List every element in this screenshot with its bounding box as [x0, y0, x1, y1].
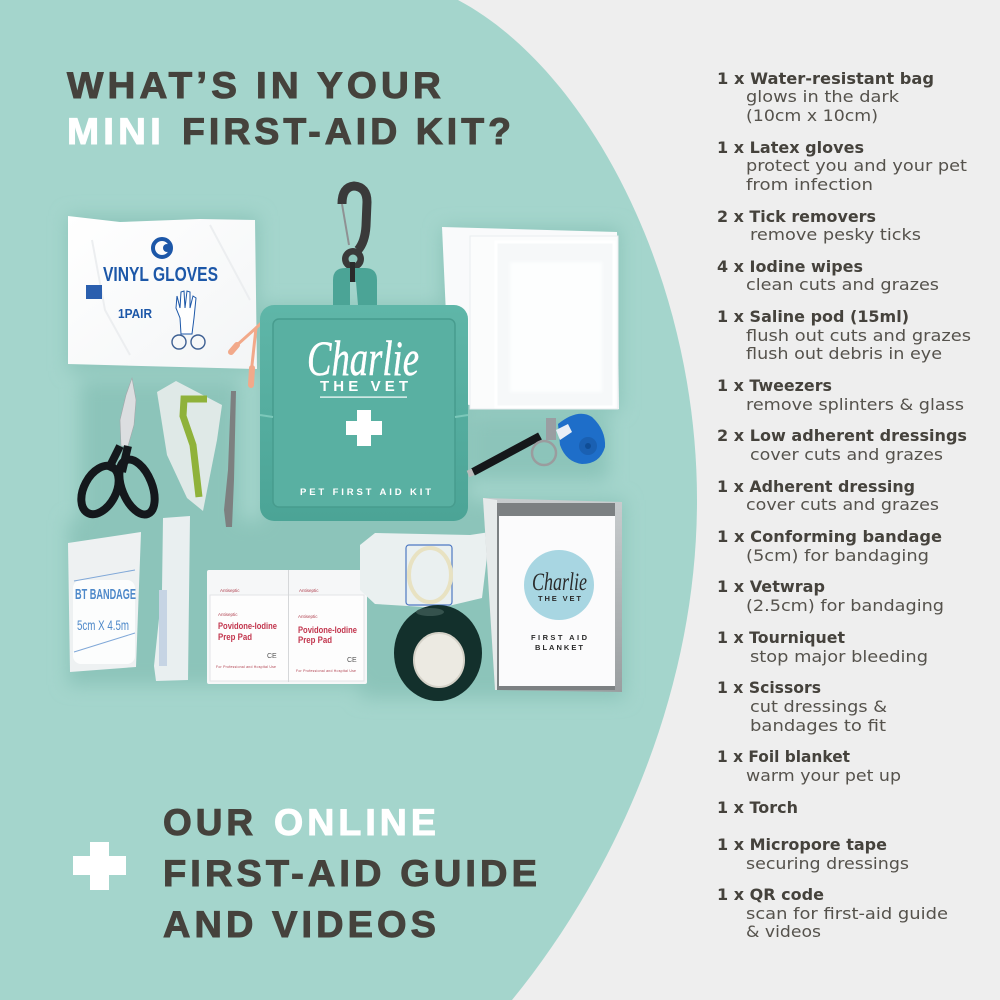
item: vinyl gloves packet: VINYL GLOVES — [103, 264, 218, 286]
bag caption: PET FIRST AID KIT — [300, 487, 431, 498]
heading: online guide: AND VIDEOS — [163, 904, 440, 945]
list item: adherent dressing: 1 x Adherent dressing — [717, 477, 915, 496]
list item: low adherent dressings: cover cuts and grazes — [750, 445, 943, 464]
list item: QR code — [717, 885, 948, 941]
bag loop tab — [333, 268, 377, 305]
item: dressings stack — [442, 227, 619, 409]
list item: bag: 1 x Water-resistant bag — [717, 69, 934, 88]
item: foil blanket: FIRST AID — [531, 633, 588, 642]
list item: bag — [717, 69, 934, 125]
list item: gloves: protect you and your pet — [746, 156, 967, 175]
list item: tweezers — [717, 376, 964, 414]
item: iodine wipes: Antiseptic — [220, 588, 240, 593]
item: scissors — [74, 378, 162, 520]
list item: micropore tape: securing dressings — [746, 854, 909, 873]
list item: saline pod: flush out cuts and grazes — [746, 326, 971, 345]
list item: adherent dressing — [717, 477, 939, 514]
blanket logo — [524, 550, 594, 620]
list item: saline pod: flush out debris in eye — [746, 344, 942, 363]
list item: vetwrap: 1 x Vetwrap — [717, 577, 825, 596]
bag logo: Charlie — [307, 330, 419, 386]
list item: tick removers: remove pesky ticks — [750, 225, 921, 244]
item: foil blanket: BLANKET — [535, 643, 583, 652]
item: vetwrap roll — [394, 605, 482, 701]
list item: scissors: bandages to fit — [750, 716, 886, 735]
list item: tweezers: remove splinters & glass — [746, 395, 964, 414]
list item: gloves: 1 x Latex gloves — [717, 138, 864, 157]
list item: micropore tape — [717, 835, 909, 873]
title: WHAT’S IN YOUR — [67, 65, 445, 106]
item: iodine wipes: Prep Pad — [298, 635, 332, 645]
list item: foil blanket: warm your pet up — [746, 766, 901, 785]
bag body — [260, 305, 468, 521]
item: iodine wipes: Antiseptic — [299, 588, 319, 593]
list item: iodine wipes: 4 x Iodine wipes — [717, 257, 863, 276]
list item: low adherent dressings — [717, 426, 967, 464]
contents list — [717, 69, 971, 941]
item: saline pod — [154, 516, 190, 681]
item: iodine wipes: CE — [347, 657, 357, 664]
item: first-aid bag — [231, 262, 468, 521]
list item: iodine wipes — [717, 257, 939, 294]
item: iodine wipes: Antiseptic — [298, 614, 318, 619]
list item: conforming bandage: 1 x Conforming bandage — [717, 527, 942, 546]
item: iodine wipes: For Professional and Hospital Use — [216, 665, 276, 669]
list item: adherent dressing: cover cuts and grazes — [746, 495, 939, 514]
list item: saline pod — [717, 307, 971, 363]
item: iodine wipes: For Professional and Hospital Use — [296, 669, 356, 673]
background: teal curved panel — [0, 0, 697, 1000]
list item: tourniquet — [717, 628, 928, 666]
list item: torch: 1 x Torch — [717, 798, 798, 817]
list item: vetwrap — [717, 577, 944, 615]
list item: micropore tape: 1 x Micropore tape — [717, 835, 887, 854]
list item: tourniquet: stop major bleeding — [750, 647, 928, 666]
item: tweezers — [224, 391, 236, 527]
item: iodine wipes: Povidone-Iodine — [298, 625, 357, 635]
list item: QR code: 1 x QR code — [717, 885, 824, 904]
item: carabiner clip — [342, 186, 367, 270]
title: FIRST-AID KIT? — [182, 111, 515, 152]
item: iodine wipes: Antiseptic — [218, 612, 238, 617]
list item: tick removers — [717, 207, 921, 244]
list item: scissors: cut dressings & — [750, 697, 887, 716]
item: conforming bandage: 5cm X 4.5m — [77, 617, 129, 633]
bag cross — [346, 410, 382, 446]
list item: scissors: 1 x Scissors — [717, 678, 821, 697]
icon: white cross — [73, 842, 126, 890]
item: tick remover — [157, 381, 222, 511]
item: torch and tourniquet — [468, 414, 605, 474]
item: iodine wipes — [207, 570, 367, 684]
list item: gloves: from infection — [746, 175, 873, 194]
list item: QR code: & videos — [746, 922, 821, 941]
item: conforming bandage — [68, 532, 141, 672]
list item: low adherent dressings: 2 x Low adherent dressings — [717, 426, 967, 445]
item: iodine wipes: Povidone-Iodine — [218, 621, 277, 631]
item: micropore tape — [360, 532, 490, 608]
heading: online guide: OUR — [163, 802, 257, 843]
soft shadow behind kit contents — [68, 216, 624, 698]
list item: conforming bandage — [717, 527, 942, 565]
title: MINI — [67, 111, 165, 152]
list item: tick removers: 2 x Tick removers — [717, 207, 876, 226]
item: iodine wipes: CE — [267, 653, 277, 660]
list item: gloves — [717, 138, 967, 194]
heading: online guide: ONLINE — [274, 802, 440, 843]
heading: online guide: FIRST-AID GUIDE — [163, 853, 541, 894]
item: first-aid bag: THE VET — [320, 378, 408, 395]
item: foil blanket — [483, 498, 622, 692]
list item: bag: glows in the dark — [746, 87, 900, 106]
list item: foil blanket — [717, 747, 901, 785]
list item: conforming bandage: (5cm) for bandaging — [746, 546, 929, 565]
list item: tourniquet: 1 x Tourniquet — [717, 628, 845, 647]
list item: bag: (10cm x 10cm) — [746, 106, 878, 125]
item: foil blanket: THE VET — [538, 594, 581, 603]
heading: online guide — [163, 802, 541, 945]
list item: QR code: scan for first-aid guide — [746, 904, 948, 923]
item: iodine wipes: Prep Pad — [218, 632, 252, 642]
list item: foil blanket: 1 x Foil blanket — [717, 747, 850, 766]
list item: saline pod: 1 x Saline pod (15ml) — [717, 307, 909, 326]
list item: tweezers: 1 x Tweezers — [717, 376, 832, 395]
item: conforming bandage: BT BANDAGE — [75, 586, 136, 603]
title — [67, 65, 515, 152]
zip pulls — [231, 309, 276, 385]
list item: vetwrap: (2.5cm) for bandaging — [746, 596, 944, 615]
item: foil blanket: Charlie — [532, 569, 587, 596]
list item: scissors — [717, 678, 887, 735]
item: vinyl gloves packet — [68, 216, 257, 369]
item: vinyl gloves packet: 1PAIR — [118, 306, 153, 321]
list item: iodine wipes: clean cuts and grazes — [746, 275, 939, 294]
